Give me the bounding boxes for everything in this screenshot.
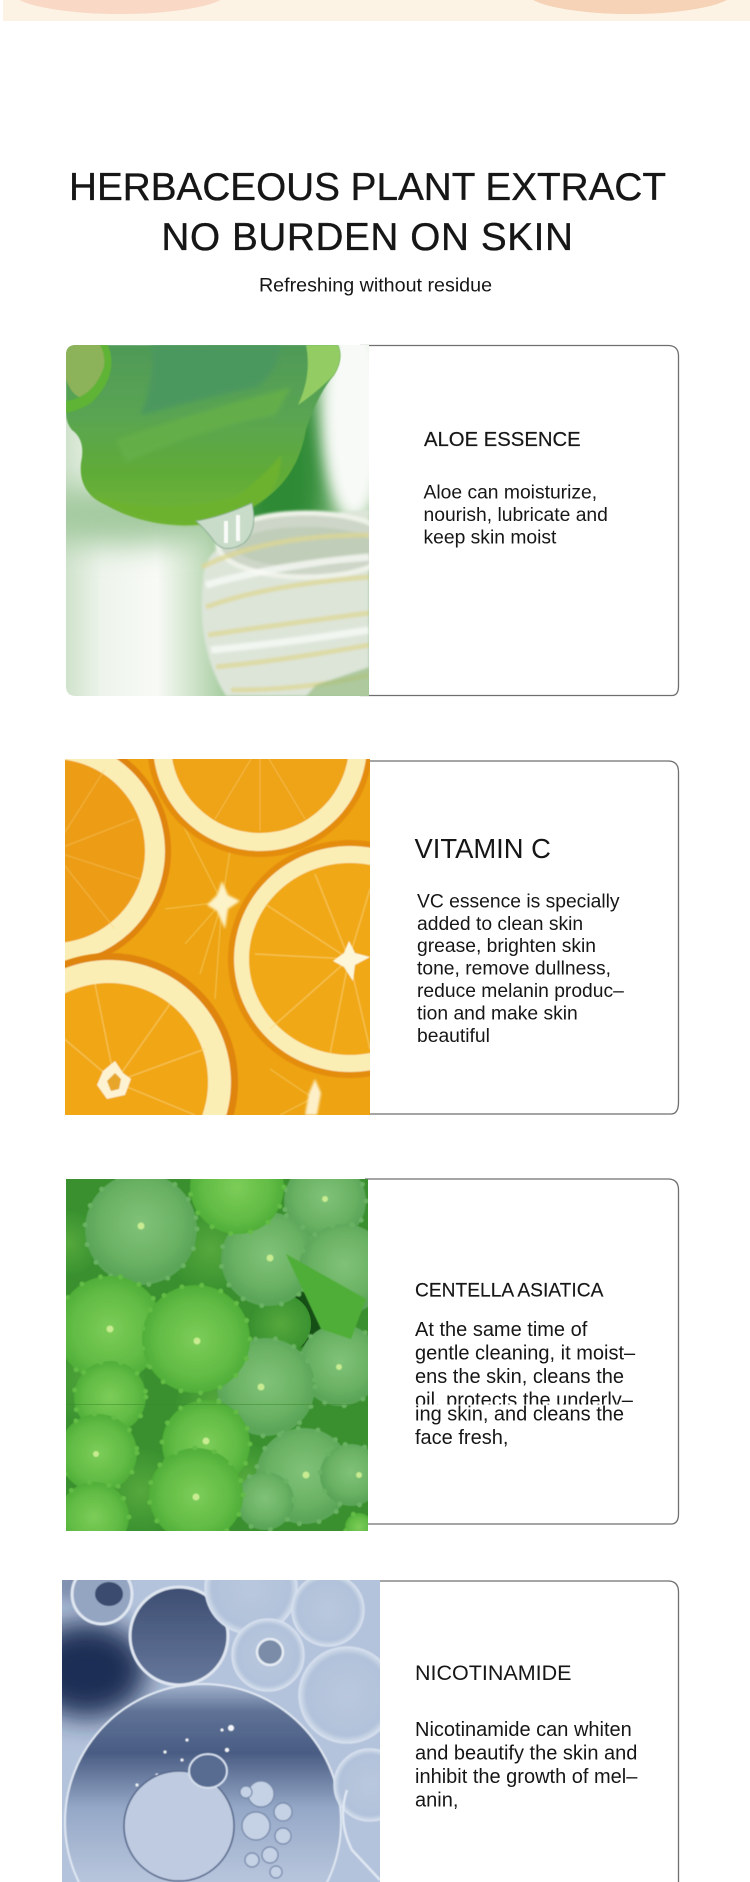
bubble cluster (240, 1781, 292, 1878)
description: centella: ing skin, and cleans the (415, 1404, 624, 1426)
description: nicotinamide (415, 1719, 638, 1812)
card border (365, 1179, 678, 1524)
bright leaves (66, 1179, 368, 1531)
aloe photo (66, 345, 369, 696)
description: aloe (424, 482, 608, 548)
description: nicotinamide: inhibit the growth of mel– (415, 1766, 638, 1788)
heading: vitamin c: VITAMIN C (414, 833, 551, 864)
small inner bubble (257, 1639, 283, 1665)
top banner strip (3, 0, 750, 21)
description: aloe: Aloe can moisturize, (424, 482, 597, 504)
description: centella (415, 1319, 636, 1449)
description: aloe: nourish, lubricate and (424, 505, 608, 526)
pale leaves (82, 1179, 368, 1531)
subtitle: Refreshing without residue (259, 274, 492, 296)
title: HERBACEOUS PLANT EXTRACT (69, 166, 666, 209)
orange slices photo (65, 759, 370, 1115)
panel: nicotinamide (62, 1580, 680, 1882)
description: vitamin c (417, 892, 624, 1047)
leaf centres (93, 1196, 362, 1500)
panel: aloe essence (66, 344, 680, 696)
bubble: dark (130, 1587, 228, 1685)
description: vitamin c: reduce melanin produc– (417, 981, 624, 1002)
card border (375, 1581, 678, 1882)
centella leaves photo (66, 1179, 368, 1531)
pointed leaf (286, 1254, 366, 1339)
description: centella: At the same time of (415, 1319, 588, 1341)
card border (365, 761, 678, 1114)
nicotinamide bubbles photo (62, 1580, 380, 1882)
orange slice left (65, 759, 172, 962)
heading: centella asiatica: CENTELLA ASIATICA (415, 1280, 604, 1302)
title (69, 166, 666, 259)
description: centella: gentle cleaning, it moist– (415, 1342, 636, 1364)
darker back leaves (66, 1219, 311, 1524)
description: aloe: keep skin moist (424, 528, 557, 548)
panel: centella asiatica (66, 1178, 680, 1531)
description: centella: ens the skin, cleans the (415, 1366, 624, 1388)
pale bubbles (204, 1580, 380, 1822)
description: vitamin c: grease, brighten skin (417, 936, 596, 957)
large bubble (65, 1684, 341, 1882)
water drop (196, 503, 254, 549)
description: vitamin c: beautiful (417, 1026, 490, 1047)
heading: aloe essence: ALOE ESSENCE (424, 429, 581, 451)
description: nicotinamide: and beautify the skin and (415, 1742, 637, 1764)
glass jar (200, 508, 369, 696)
description: vitamin c: tion and make skin (417, 1004, 578, 1024)
pale lower bubble (124, 1771, 234, 1881)
title: NO BURDEN ON SKIN (161, 216, 574, 259)
description: centella: oil, protects the underly– (415, 1390, 634, 1412)
orange slice bottom-left (65, 952, 238, 1115)
description: nicotinamide: anin, (415, 1790, 458, 1812)
heading: nicotinamide: NICOTINAMIDE (415, 1661, 571, 1685)
background slice segments (165, 809, 313, 1115)
description: nicotinamide: Nicotinamide can whiten (415, 1719, 632, 1741)
panel: vitamin c (65, 759, 680, 1115)
card border (360, 346, 678, 696)
description: vitamin c: VC essence is specially (417, 892, 620, 912)
description: centella: face fresh, (415, 1427, 508, 1449)
bubble: small top-left (70, 1580, 134, 1626)
description: vitamin c: added to clean skin (417, 914, 583, 935)
description: vitamin c: tone, remove dullness, (417, 958, 611, 980)
orange slice top (148, 759, 370, 857)
orange slice right (228, 840, 370, 1078)
aloe leaf (66, 345, 340, 525)
small dark bubble (189, 1754, 227, 1788)
